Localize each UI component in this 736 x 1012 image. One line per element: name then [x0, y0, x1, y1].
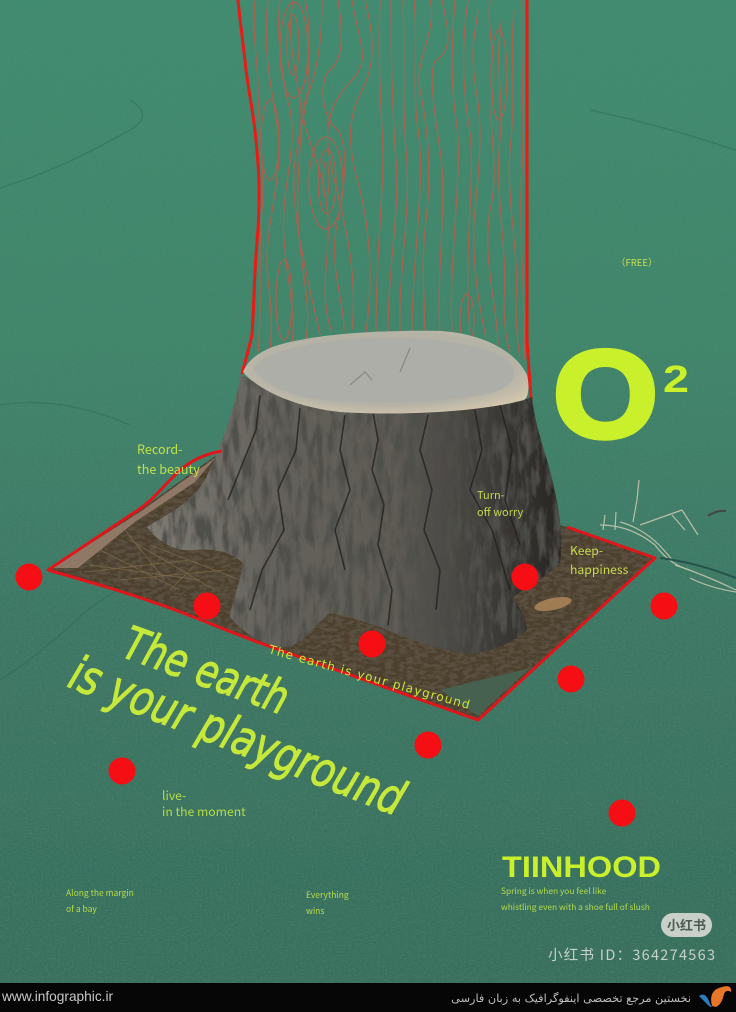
pinecone	[533, 594, 573, 614]
label: Everything wins	[306, 889, 349, 917]
label: Along the margin of a bay: Along the margin	[66, 887, 134, 899]
bark cracks	[228, 395, 520, 625]
label: Along the margin of a bay	[66, 887, 134, 915]
tree stump	[147, 331, 561, 653]
main title: The earth is your playground	[62, 616, 413, 827]
label: Along the margin of a bay: of a bay	[66, 903, 97, 915]
O squared heading: 2	[663, 359, 689, 401]
red ground outline	[48, 451, 655, 720]
red dots	[16, 564, 678, 826]
label: Record the beauty: the beauty	[137, 459, 200, 478]
O squared heading: O	[553, 326, 658, 464]
stump cut surface	[243, 331, 528, 414]
label: live in the moment: live-	[162, 786, 186, 804]
brand: TIINHOOD: TIINHOOD	[502, 851, 661, 884]
label: live in the moment	[162, 786, 246, 820]
ground creases	[0, 100, 736, 680]
watermark badge: Xiaohongshu: 小红书	[667, 915, 706, 934]
label: Turn off worry: Turn-	[477, 487, 505, 503]
watermark ID: 小红书 ID：364274563	[548, 944, 715, 965]
label: Record the beauty: Record-	[137, 439, 183, 458]
brand: TIINHOOD: whistling even with a shoe full of slush	[501, 901, 650, 913]
footer Persian tagline: نخستین مرجع تخصصی اینفوگرافیک به زبان فارسی	[451, 991, 691, 1006]
main title: The earth is your playground: The earth	[116, 616, 296, 725]
label: FREE: （FREE）	[616, 255, 657, 269]
label: Everything wins: wins	[306, 905, 324, 917]
brand: TIINHOOD	[501, 851, 661, 913]
small curved slogan along the outline: The earth is your playground	[266, 642, 471, 712]
label: Everything wins: Everything	[306, 889, 349, 901]
footer URL: www.infographic.ir	[1, 989, 114, 1004]
label: Keep happiness: Keep-	[570, 541, 603, 559]
footer bar	[0, 983, 736, 1012]
label: Turn off worry	[477, 487, 524, 520]
label: Turn off worry: off worry	[477, 504, 524, 520]
trunk left red edge	[238, 0, 259, 374]
label: live in the moment: in the moment	[162, 802, 246, 820]
trunk right red edge	[526, 0, 531, 400]
dry grass tuft	[600, 480, 736, 592]
light earth strip beneath the left edge	[52, 458, 215, 568]
tree trunk outline with wood grain	[238, 0, 531, 400]
twigs	[85, 530, 240, 590]
label: Keep happiness: happiness	[570, 560, 629, 578]
stump bark	[147, 374, 561, 653]
footer logo	[699, 986, 731, 1007]
ground patch with soil	[48, 451, 736, 720]
watermark badge: Xiaohongshu	[661, 913, 712, 937]
moss corner	[440, 668, 530, 716]
brand: TIINHOOD: Spring is when you feel like	[501, 885, 607, 897]
wood grain contour lines	[254, 0, 524, 360]
label: Record the beauty	[137, 439, 200, 478]
label: Keep happiness	[570, 541, 629, 578]
main title: The earth is your playground: is your playground	[62, 645, 413, 827]
